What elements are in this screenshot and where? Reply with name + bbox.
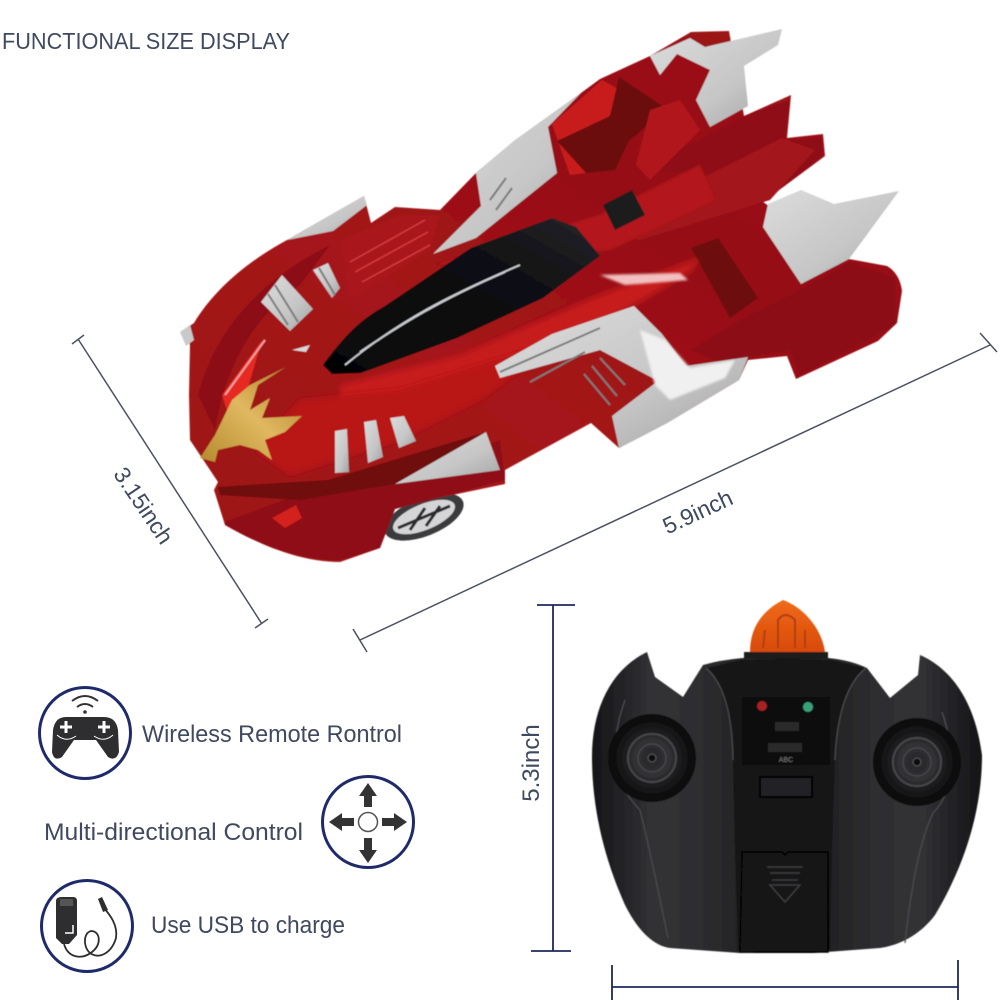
mode panel — [742, 697, 830, 765]
remote body — [592, 652, 982, 953]
dimension: remote height 5.3inch — [518, 605, 575, 951]
right joystick — [873, 718, 961, 806]
feature: USB charge — [42, 880, 345, 972]
mode panel: ABC — [779, 757, 793, 764]
icon: usb cable — [42, 880, 132, 972]
dimension: remote width — [612, 960, 958, 1000]
antenna mount — [744, 652, 828, 668]
antenna markings — [763, 615, 805, 648]
car body — [184, 31, 902, 562]
title: FUNCTIONAL SIZE DISPLAY — [2, 28, 290, 54]
canopy — [323, 218, 600, 374]
antenna tip — [750, 600, 825, 652]
label: Use USB to charge — [151, 912, 345, 939]
dimension: car length 5.9inch — [353, 333, 997, 652]
silver bright area — [640, 330, 735, 400]
battery cover — [740, 852, 828, 952]
sensor — [603, 190, 645, 230]
remote control — [592, 600, 982, 953]
silver panels — [261, 29, 899, 484]
grip contours — [615, 668, 952, 943]
car illustration — [180, 29, 902, 562]
icon: gamepad — [40, 688, 130, 778]
feature: multi-directional control — [44, 776, 414, 868]
gold emblem — [200, 367, 302, 462]
label: Wireless Remote Rontrol — [142, 721, 402, 748]
dimension: car width 3.15inch — [72, 335, 268, 628]
feature: wireless remote control — [40, 688, 402, 778]
dimension: car length 5.9inch: 5.9inch — [659, 484, 737, 539]
centre column — [706, 660, 866, 950]
wheel — [378, 484, 470, 550]
left joystick — [608, 714, 696, 802]
canopy highlights — [345, 265, 520, 365]
label: Multi-directional Control — [44, 819, 303, 846]
icon: four arrows — [322, 776, 414, 868]
dimension: car width 3.15inch: 3.15inch — [109, 462, 179, 549]
slider — [760, 777, 812, 797]
silver grille details — [268, 178, 625, 405]
body shading — [180, 77, 895, 560]
dimension: remote height 5.3inch: 5.3inch — [518, 724, 545, 802]
